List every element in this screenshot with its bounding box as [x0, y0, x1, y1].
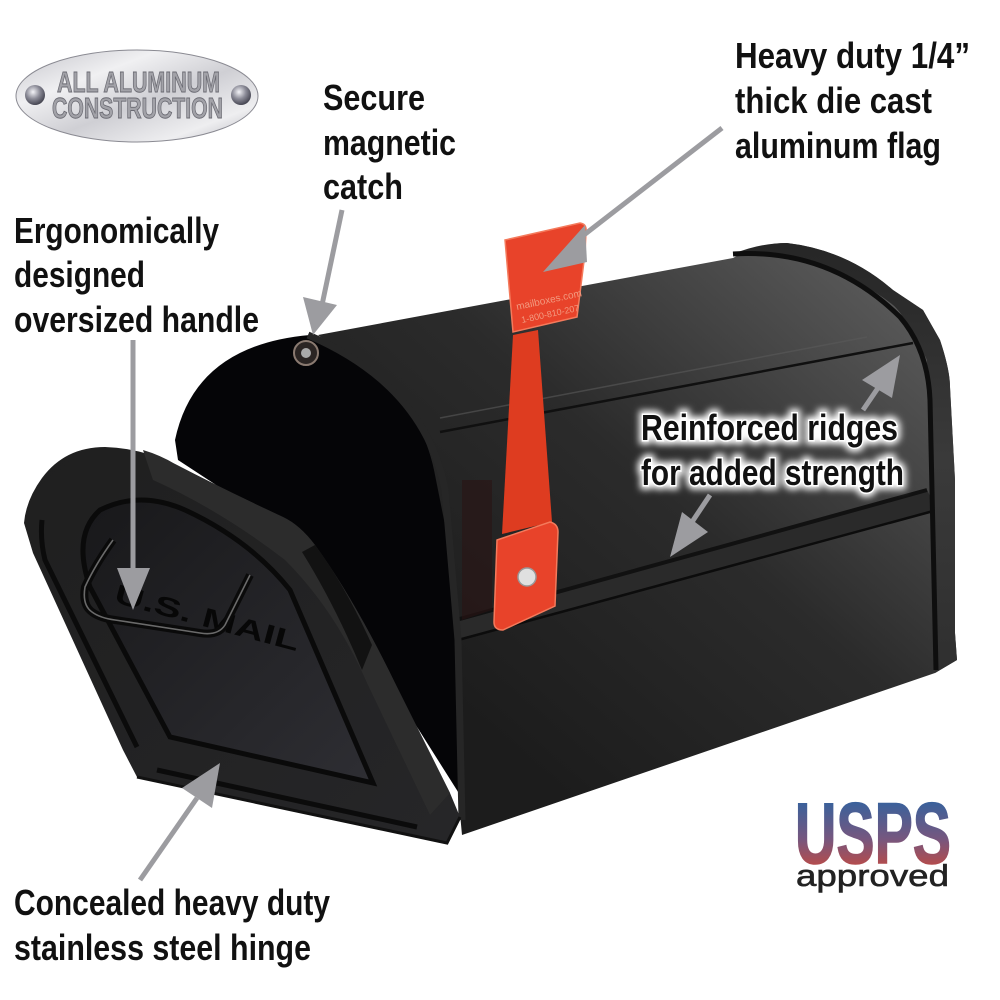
door lettering: U.S. MAIL [111, 579, 303, 657]
arrow: upper ridge [862, 355, 900, 410]
magnetic catch [294, 341, 318, 365]
label: flag: thick die cast [735, 80, 932, 121]
badge: all aluminum construction: ALL ALUMINUM [57, 67, 220, 99]
label: hinge [14, 882, 330, 968]
badge: all aluminum construction: CONSTRUCTION [52, 93, 223, 125]
label: hinge: stainless steel hinge [14, 927, 311, 968]
flag [494, 223, 586, 630]
label: flag: Heavy duty 1/4” [735, 35, 970, 76]
label: secure magnetic catch [323, 77, 456, 207]
arrow: lower ridge [670, 495, 710, 557]
back band [733, 243, 957, 673]
mailbox opening [175, 335, 460, 795]
label: ridges: for added strength [641, 452, 904, 493]
logo: USPS approved: approved [796, 858, 949, 893]
arrow: handle [117, 340, 150, 610]
label: secure magnetic catch: catch [323, 166, 403, 207]
flag: 1-800-810-207 [520, 303, 580, 325]
label: ridges: Reinforced ridges [641, 407, 898, 448]
label: secure magnetic catch: Secure [323, 77, 425, 118]
arrows [117, 128, 900, 880]
label: ridges: for added strength [641, 452, 904, 493]
label: handle: Ergonomically [14, 210, 219, 251]
mailbox [24, 243, 957, 843]
arrow: flag [543, 128, 722, 272]
door [24, 447, 460, 843]
label: secure magnetic catch: magnetic [323, 122, 456, 163]
label: ridges: Reinforced ridges [641, 407, 898, 448]
label: handle [14, 210, 259, 340]
label: flag [735, 35, 970, 166]
logo: USPS approved [795, 786, 951, 893]
badge: all aluminum construction [16, 50, 258, 142]
label: ridges [641, 407, 904, 493]
opening rim [308, 335, 462, 820]
label: handle: designed [14, 254, 145, 295]
label: hinge: Concealed heavy duty [14, 882, 330, 923]
door panel [83, 500, 373, 783]
flag: mailboxes.com [515, 288, 583, 313]
arrow: hinge [140, 763, 220, 880]
arrow: magnetic catch [303, 210, 342, 335]
door rim strip [143, 450, 450, 815]
mailbox body [318, 243, 957, 835]
door handle [84, 540, 250, 634]
label: handle: oversized handle [14, 299, 259, 340]
label: flag: aluminum flag [735, 125, 941, 166]
